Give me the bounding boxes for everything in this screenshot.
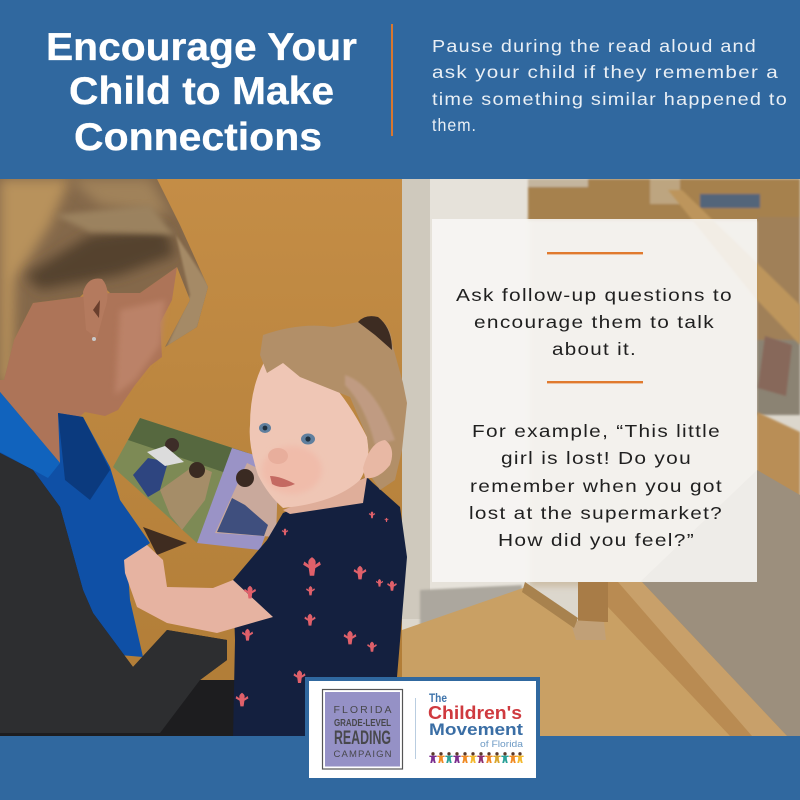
dark cardigan [0,453,235,740]
white text card [432,219,757,582]
woman's ear [83,278,108,296]
logo box [305,677,540,800]
header intro text: them. [432,115,477,135]
pictures on the wall [758,336,792,396]
toddler face [250,356,368,508]
header intro text: Pause during the read aloud and [432,36,757,56]
wooden ramp [607,582,787,736]
lobster print [236,511,397,706]
wooden rail [668,190,800,345]
toddler hair [260,316,407,490]
door background [0,179,402,680]
gate post [578,582,608,622]
logo: Florida Grade-Level Reading Campaign: READING [334,728,391,749]
picture book [113,418,282,555]
logo: row of paper-chain children [429,752,524,763]
logo: The Children's Movement of Florida: of Florida [480,739,523,749]
logo divider [415,698,416,759]
title [46,26,357,159]
book right page [197,448,282,550]
cork floor [402,588,735,736]
carpet [640,470,800,736]
logo: The Children's Movement of Florida [428,693,523,749]
navy lobster-print shirt [233,477,407,740]
logo: The Children's Movement of Florida: Movement [429,720,523,739]
example text: remember when you got [470,476,723,496]
wooden gate [528,179,800,415]
woman [0,179,235,740]
toddler eyes [259,423,315,444]
logo: Florida Grade-Level Reading Campaign [322,690,402,769]
example text: For example, “This little [472,421,721,441]
follow-up questions text [456,285,733,359]
blue polo shirt [0,392,150,657]
lower gate panel [757,412,800,495]
toddler [124,316,407,740]
lower orange rule [547,381,643,383]
header intro text: ask your child if they remember a [432,62,779,82]
logo: The Children's Movement of Florida: Children's [428,702,522,723]
example text: girl is lost! Do you [501,448,692,468]
room background [402,179,800,736]
book left page [113,418,248,543]
logo: The Children's Movement of Florida: The [429,693,447,705]
header divider line [391,24,393,136]
example text: lost at the supermarket? [469,503,723,523]
top orange rule [547,252,643,254]
example text [469,421,723,550]
title: Connections [74,116,322,159]
footer band [0,736,800,800]
toddler arm and hand [124,545,273,633]
logo: Florida Grade-Level Reading Campaign: FLORIDA [334,704,392,716]
book shadow [143,527,187,555]
woman's face and neck [0,267,177,463]
toddler nose and mouth [268,448,295,487]
follow-up questions text: Ask follow-up questions to [456,285,733,305]
logo: Florida Grade-Level Reading Campaign: GRADE-LEVEL [334,717,391,729]
follow-up questions text: encourage them to talk [474,312,715,332]
toddler ear [363,440,392,478]
card panel [432,219,757,582]
logo: Florida Grade-Level Reading Campaign: CAMPAIGN [334,749,392,760]
example text: How did you feel?” [498,530,695,550]
follow-up questions text: about it. [552,339,637,359]
header intro text: time something similar happened to [432,89,788,109]
title: Child to Make [69,70,334,113]
title: Encourage Your [46,26,357,69]
woman's hair [0,179,215,384]
photo: caregiver reading to a toddler [0,179,800,740]
toddler neck [283,477,367,514]
header intro text [432,36,788,135]
